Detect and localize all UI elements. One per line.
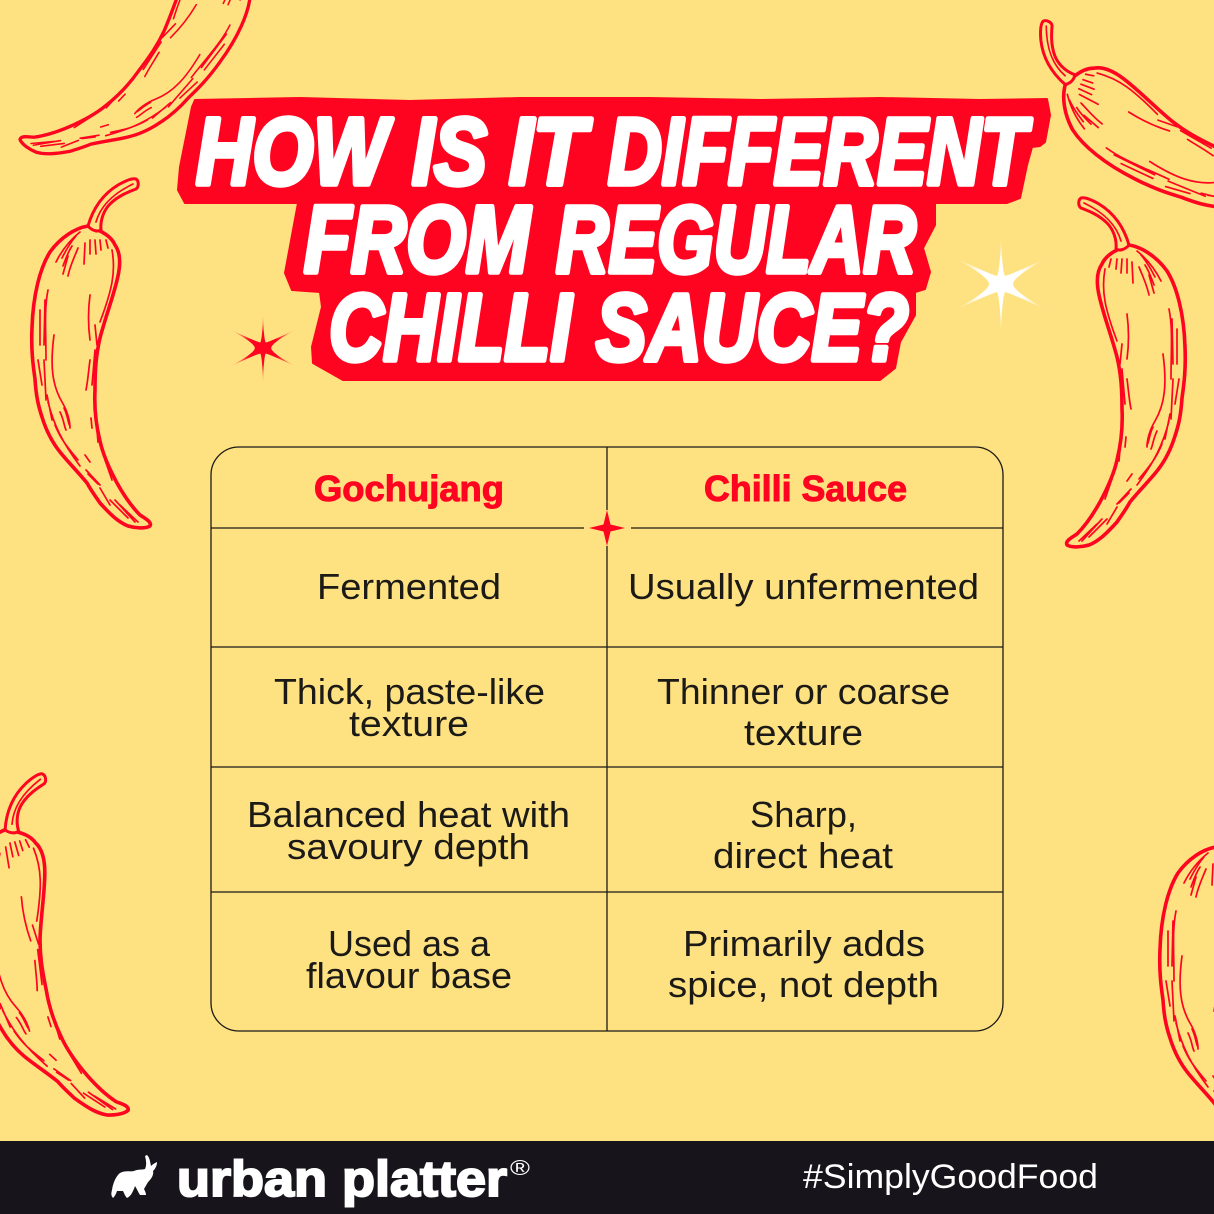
table column: chilli sauce: Thinner or coarse [657,671,950,712]
table column: gochujang [247,566,570,996]
table column: chilli sauce: Sharp, [750,794,857,835]
title lettering: FROM [304,186,532,292]
icon: chilli pepper bottom left [0,771,129,1137]
icon: chilli pepper right [1067,198,1185,547]
title lettering: CHILLI [329,274,573,380]
icon: elephant logo [111,1155,157,1198]
hashtag: #SimplyGoodFood [803,1158,1098,1196]
title red backdrop [178,98,1050,380]
table column: gochujang: Fermented [317,566,501,607]
title lettering: IT [509,98,592,204]
table column: chilli sauce: spice, not depth [668,964,939,1005]
table column: chilli sauce [628,566,979,1005]
title lettering [196,98,1032,380]
title [178,98,1050,380]
table column: chilli sauce: texture [744,712,863,753]
icon: red sparkle [232,315,294,382]
table column: gochujang: texture [349,703,469,744]
icon: table centre star [589,510,625,546]
table headers: Gochujang [314,468,504,509]
icon: white sparkle [955,236,1047,334]
table headers [314,468,907,509]
icon: chilli pepper bottom right [1160,800,1214,1149]
table column: gochujang: flavour base [306,955,512,996]
table headers: Chilli Sauce [704,468,907,509]
table column: gochujang: Used as a [328,923,491,964]
title lettering: SAUCE? [596,274,909,380]
comparison table [211,447,1003,1031]
title lettering: REGULAR [556,186,916,292]
table column: gochujang: savoury depth [287,826,530,867]
table column: chilli sauce: direct heat [713,835,893,876]
table column: chilli sauce: Primarily adds [683,923,925,964]
footer bar [0,1141,1214,1214]
registered mark: ® [510,1157,531,1180]
table column: gochujang: Thick, paste-like [274,671,545,712]
title lettering: DIFFERENT [608,98,1032,204]
icon: chilli pepper top left [19,0,306,209]
icon: chilli pepper top right [999,8,1214,263]
brand name: urban platter [177,1151,507,1207]
table column: chilli sauce: Usually unfermented [628,566,979,607]
table column: gochujang: Balanced heat with [247,794,570,835]
icon: chilli pepper left [32,179,150,528]
title lettering: IS [412,98,487,204]
title lettering: HOW [196,98,394,204]
